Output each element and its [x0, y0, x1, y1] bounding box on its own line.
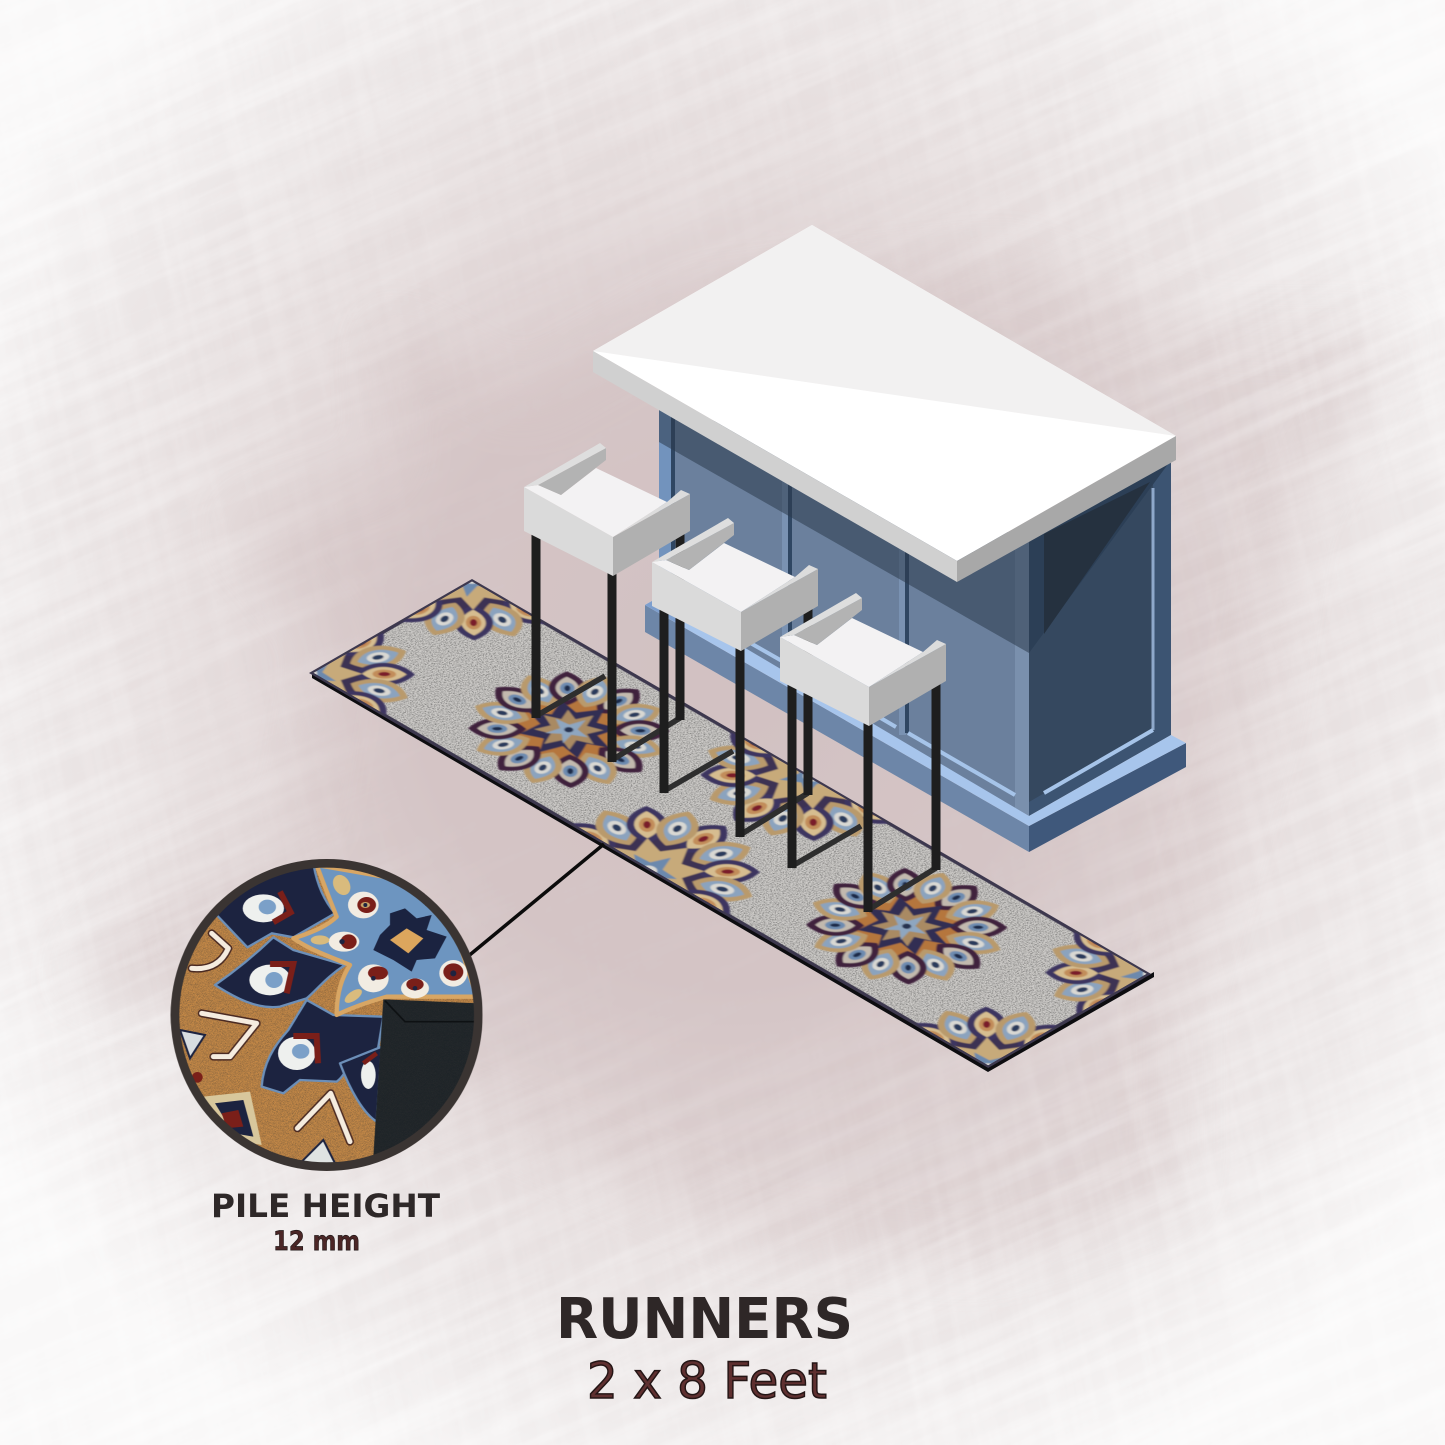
dark ring — [175, 863, 478, 1167]
bar stool one — [524, 443, 690, 762]
corner motif left — [314, 633, 416, 715]
corner motif bottom — [916, 1006, 1057, 1066]
split mandala upper edge — [654, 685, 969, 868]
panel stiles — [659, 400, 1029, 816]
blue star flower — [293, 865, 477, 1015]
leader line — [466, 844, 604, 958]
bar stool three — [780, 593, 946, 912]
lower corner motifs — [180, 1030, 337, 1167]
central mandala one — [467, 671, 670, 788]
circular detail: pile close-up — [170, 857, 483, 1173]
orange pile — [179, 868, 474, 1162]
split mandala lower edge — [573, 806, 761, 914]
title: runners: RUNNERS — [556, 1287, 853, 1352]
cabinet left face — [659, 400, 1029, 816]
central mandala two — [764, 844, 1049, 1009]
counter side edge — [957, 436, 1176, 582]
backing fold — [385, 1001, 475, 1022]
label: 12 mm: 12 mm — [273, 1226, 360, 1257]
plinth — [645, 597, 1186, 852]
subtitle: size: 2 x 8 Feet — [587, 1352, 827, 1410]
dark flower — [373, 908, 447, 972]
countertop — [593, 225, 1176, 582]
rug thickness edge — [312, 672, 1154, 1072]
cast shadow on left face — [659, 400, 1029, 653]
corner motif top — [402, 582, 544, 641]
right panel highlights — [1044, 488, 1153, 793]
navy petals — [215, 863, 383, 1122]
rug surface with mandalas — [309, 579, 1151, 1068]
counter front edge — [593, 351, 957, 582]
cabinet right face — [1029, 458, 1171, 816]
right face shadow — [1029, 460, 1171, 653]
counter surface — [593, 225, 1176, 561]
bar stool two — [652, 518, 818, 837]
cream hook motifs — [192, 933, 350, 1142]
rug runner — [309, 579, 1154, 1072]
navy petal florets — [243, 892, 377, 1089]
corner motif right — [818, 885, 1146, 1014]
cream and red florets — [311, 872, 467, 1006]
label: pile height: PILE HEIGHT — [211, 1187, 440, 1225]
panel bottom highlights — [675, 600, 1015, 795]
surface gloss — [593, 225, 1176, 436]
kitchen island cabinet — [645, 400, 1186, 852]
rug backing flap — [373, 999, 477, 1170]
